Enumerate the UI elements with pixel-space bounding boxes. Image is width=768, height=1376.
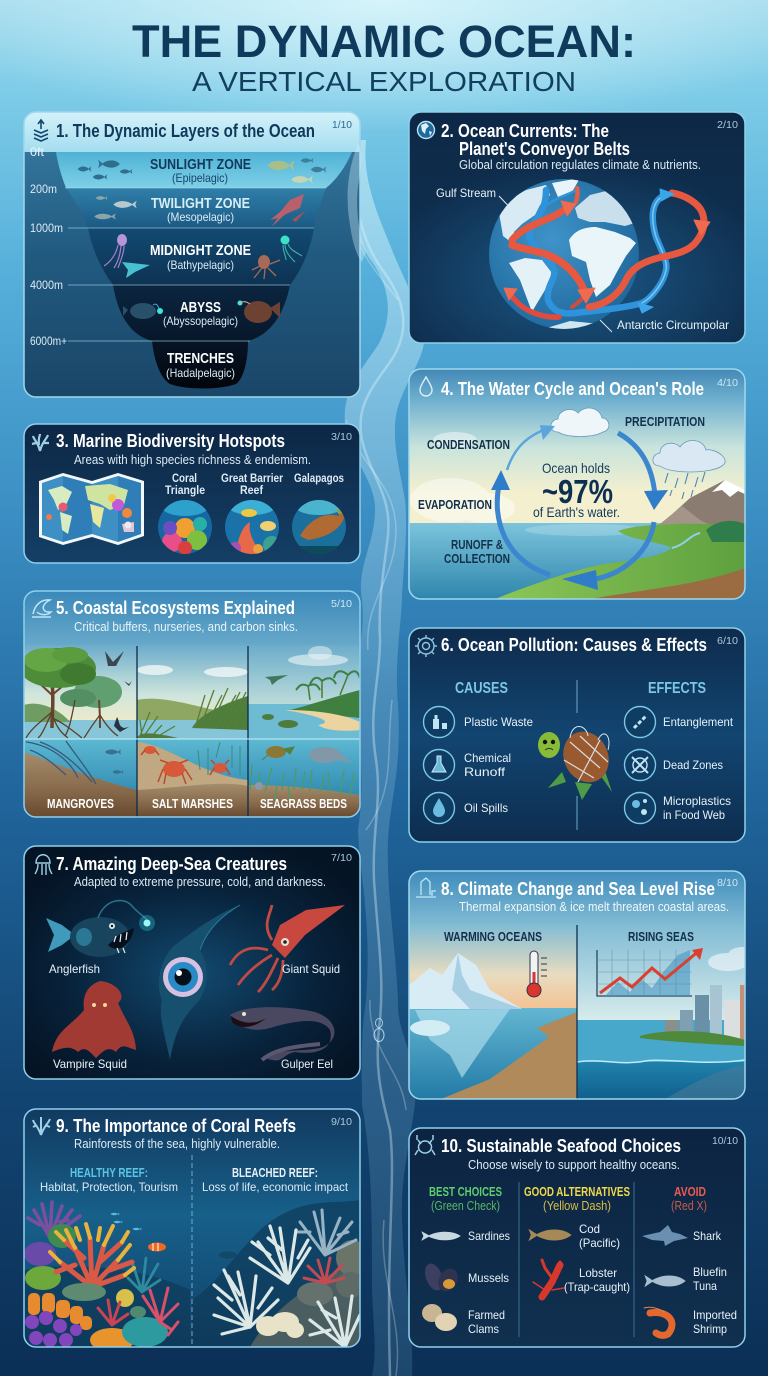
effect labels: Microplastics: [663, 794, 731, 808]
sardine: [421, 1231, 461, 1241]
hotspot labels: Triangle: [165, 483, 205, 497]
heading 2: 2. Ocean Currents: The: [441, 121, 609, 141]
column: good alternatives: (Pacific): [579, 1236, 620, 1250]
hotspot image: galapagos: [292, 497, 346, 554]
column: avoid: Imported: [693, 1308, 737, 1322]
column: good alternatives: (Trap-caught): [564, 1280, 630, 1294]
lobster: [533, 1260, 564, 1297]
heading 6: 6. Ocean Pollution: Causes & Effects: [441, 635, 707, 655]
label: Anglerfish: Anglerfish: [49, 962, 100, 976]
sunlight zone: [56, 152, 352, 188]
panel 1: ocean layers: [24, 112, 360, 397]
zone labels: TWILIGHT ZONE: [151, 196, 250, 212]
effect labels: in Food Web: [663, 808, 725, 822]
column titles: CAUSES: [455, 680, 508, 697]
page count 2: 2/10: [717, 119, 738, 131]
depth labels: 1000m: [30, 221, 63, 235]
trenches: [152, 341, 248, 388]
hotspot labels: Great Barrier: [221, 471, 283, 485]
zone labels: MIDNIGHT ZONE: [150, 243, 251, 259]
cycle labels: [418, 415, 705, 566]
ecosystem labels: SALT MARSHES: [152, 796, 233, 811]
label: Gulf Stream: [436, 188, 508, 206]
panel 10 frame: [409, 1128, 745, 1347]
page count 3: 3/10: [331, 431, 352, 443]
column: best choices: Clams: [468, 1322, 499, 1336]
effect labels: Entanglement: [663, 715, 734, 729]
cause labels: Runoff: [464, 765, 506, 779]
header band: [24, 112, 360, 152]
label: Gulf Stream: Gulf Stream: [436, 186, 496, 200]
effect labels: Dead Zones: [663, 758, 723, 772]
page count 8: 8/10: [717, 877, 738, 889]
column: avoid: Bluefin: [693, 1265, 727, 1279]
depth labels: 200m: [30, 182, 57, 196]
subtitle 3: Areas with high species richness & endemism.: [74, 453, 311, 467]
page count 6: 6/10: [717, 635, 738, 647]
depth labels: 6000m+: [30, 334, 67, 348]
reef captions: [40, 1166, 349, 1194]
heading 9: 9. The Importance of Coral Reefs: [56, 1116, 296, 1136]
tuna: [644, 1275, 686, 1287]
land: [495, 521, 745, 599]
icon: jellyfish: [35, 855, 52, 875]
label: Gulper Eel: Gulper Eel: [281, 1057, 333, 1071]
heading 2: Planet's Conveyor Belts: [459, 139, 630, 159]
panel 2: ocean currents: [409, 112, 745, 343]
heading 4: 4. The Water Cycle and Ocean's Role: [441, 379, 704, 399]
callout: 97 percent: of Earth's water.: [533, 504, 620, 520]
panel 7: deep sea creatures: [24, 846, 360, 1079]
column titles: [455, 680, 706, 697]
cause labels: Plastic Waste: [464, 715, 533, 729]
zone labels: (Hadalpelagic): [166, 366, 235, 380]
shark: [642, 1225, 688, 1246]
column: best choices: Sardines: [468, 1229, 510, 1243]
title: A VERTICAL EXPLORATION: [192, 66, 576, 97]
column dividers: [137, 646, 248, 817]
hotspot labels: Reef: [240, 483, 264, 497]
icon: coral: [33, 1117, 50, 1135]
subtitle 5: Critical buffers, nurseries, and carbon sinks.: [74, 620, 298, 634]
icon: layers: [34, 120, 48, 141]
cycle labels: CONDENSATION: [427, 438, 510, 452]
heading 5: 5. Coastal Ecosystems Explained: [56, 598, 295, 618]
hotspot labels: Coral: [172, 471, 197, 485]
column: avoid: Shrimp: [693, 1322, 727, 1336]
city skyline: [640, 985, 746, 1046]
warming scene: [409, 925, 577, 1099]
column: good alternatives: Cod: [579, 1222, 600, 1236]
zone labels: (Epipelagic): [172, 171, 228, 185]
heading 3: 3. Marine Biodiversity Hotspots: [56, 431, 285, 451]
current arrows: [504, 188, 710, 317]
column: mangroves: [20, 645, 137, 817]
cycle labels: COLLECTION: [444, 552, 510, 566]
rising seas scene: [577, 925, 756, 1099]
ecosystem labels: MANGROVES: [47, 796, 114, 811]
thermometer: [527, 951, 547, 997]
panel 4 frame: [409, 369, 745, 599]
callout: 97 percent: Ocean holds: [542, 460, 610, 476]
icon: crab: [415, 1135, 435, 1155]
cause labels: Oil Spills: [464, 801, 508, 815]
folded world map: [39, 473, 144, 545]
vampire squid: [52, 981, 136, 1058]
label: rising seas: RISING SEAS: [628, 930, 694, 944]
column: seagrass beds: [248, 645, 360, 817]
cause labels: Chemical: [464, 751, 511, 765]
panel 3: biodiversity hotspots: [24, 424, 360, 563]
panel 7 frame: [24, 846, 360, 1079]
column: avoid: AVOID: [674, 1184, 706, 1199]
reef captions: BLEACHED REEF:: [232, 1166, 318, 1180]
label: Vampire Squid: Vampire Squid: [53, 1057, 127, 1071]
hotspot image: coral triangle: [158, 496, 212, 555]
column: best choices: BEST CHOICES: [429, 1184, 502, 1199]
cycle labels: RUNOFF &: [451, 538, 503, 552]
icon: gear: [415, 635, 437, 657]
hotspot labels: Galapagos: [294, 471, 344, 485]
panel 5: coastal ecosystems: [20, 591, 360, 817]
gulper eel: [230, 1007, 334, 1060]
depth labels: 0ft: [30, 145, 45, 159]
mussels: [422, 1261, 462, 1295]
effect icons: [624, 706, 656, 824]
column: avoid: (Red X): [671, 1198, 707, 1213]
title: THE DYNAMIC OCEAN:: [132, 16, 636, 67]
page count 1: 1/10: [332, 119, 352, 131]
cause labels: [464, 715, 533, 815]
effect labels: [663, 715, 734, 822]
heading 10: 10. Sustainable Seafood Choices: [441, 1136, 681, 1156]
iceberg: [409, 953, 522, 1078]
reef captions: Loss of life, economic impact: [202, 1180, 349, 1194]
icon: droplet: [420, 377, 432, 396]
midnight zone: [88, 228, 314, 285]
reef captions: HEALTHY REEF:: [70, 1166, 148, 1180]
column: best choices: Mussels: [468, 1271, 509, 1285]
heading 2: [441, 121, 630, 159]
panel 9 frame: [24, 1109, 360, 1347]
heading 1: 1. The Dynamic Layers of the Ocean: [56, 121, 315, 141]
subtitle 8: Thermal expansion & ice melt threaten coastal areas.: [459, 900, 729, 914]
abyss: [113, 285, 290, 341]
shrimp: [644, 1307, 672, 1335]
clouds: [551, 408, 725, 472]
heading 7: 7. Amazing Deep-Sea Creatures: [56, 854, 287, 874]
column: best choices: [421, 1184, 510, 1336]
zone labels: (Bathypelagic): [167, 258, 234, 272]
column: avoid: Shark: [693, 1229, 722, 1243]
giant squid: [230, 905, 345, 992]
water ribbon: [345, 140, 424, 1376]
coast: [441, 1012, 577, 1099]
column: good alternatives: (Yellow Dash): [543, 1198, 611, 1213]
callout: 97 percent: [533, 460, 620, 520]
label: Giant Squid: Giant Squid: [282, 962, 340, 976]
subtitle 10: Choose wisely to support healthy oceans.: [468, 1158, 680, 1172]
subtitle 2: Global circulation regulates climate & nutrients.: [459, 158, 701, 172]
healthy reef: [24, 1202, 178, 1352]
zone labels: TRENCHES: [167, 351, 234, 367]
icon: buildings: [416, 878, 436, 897]
ecosystem labels: [47, 796, 347, 811]
cycle arrows: [491, 425, 668, 590]
column: good alternatives: GOOD ALTERNATIVES: [524, 1184, 630, 1199]
page count 10: 10/10: [712, 1135, 738, 1147]
zone labels: SUNLIGHT ZONE: [150, 157, 251, 173]
column: salt marshes: [137, 645, 248, 817]
hotspot image: great barrier reef: [225, 497, 281, 554]
icon: wave: [32, 600, 51, 617]
mountains: [660, 480, 744, 524]
water falling over panel edge: [348, 143, 366, 262]
column: best choices: Farmed: [468, 1308, 505, 1322]
cod: [528, 1229, 572, 1241]
hotspot labels: [165, 471, 344, 497]
label: Antarctic Circumpolar: Antarctic Circumpolar: [617, 318, 729, 332]
icon: entangled turtle: [538, 724, 617, 800]
icon: globe: [418, 122, 434, 138]
panel 2 frame: [409, 112, 745, 343]
title: [132, 16, 636, 97]
panel 6: ocean pollution: [409, 628, 745, 842]
sea creatures: [78, 158, 326, 323]
panel 10: sustainable seafood: [409, 1128, 745, 1347]
panel 3 frame: [24, 424, 360, 563]
panel 9: coral reefs: [24, 1109, 368, 1352]
heading 8: 8. Climate Change and Sea Level Rise: [441, 879, 715, 899]
ecosystem labels: SEAGRASS BEDS: [260, 796, 347, 811]
zone labels: ABYSS: [180, 300, 221, 316]
panel 4: water cycle: [409, 369, 745, 599]
subtitle 7: Adapted to extreme pressure, cold, and darkness.: [74, 875, 326, 889]
icon: rain: [665, 472, 705, 499]
page count 5: 5/10: [331, 598, 352, 610]
column: best choices: (Green Check): [431, 1198, 500, 1213]
page count 4: 4/10: [717, 377, 738, 389]
globe: [489, 178, 639, 334]
column: good alternatives: [524, 1184, 630, 1297]
subtitle 9: Rainforests of the sea, highly vulnerable.: [74, 1137, 280, 1151]
zone labels: (Abyssopelagic): [163, 314, 238, 328]
clams: [422, 1304, 457, 1331]
reef backdrop: [24, 1200, 360, 1347]
chart: [597, 948, 703, 996]
page count 9: 9/10: [331, 1116, 352, 1128]
zone labels: (Mesopelagic): [167, 210, 234, 224]
cycle labels: EVAPORATION: [418, 498, 492, 512]
center creature with big eye: [159, 905, 240, 1060]
anglerfish: [46, 901, 155, 957]
twilight zone: [66, 188, 326, 228]
column: good alternatives: Lobster: [579, 1266, 617, 1280]
cycle labels: PRECIPITATION: [625, 415, 705, 429]
panel 6 frame: [409, 628, 745, 842]
icon: coral: [32, 434, 49, 451]
panel 8: climate change: [409, 871, 756, 1099]
bleached reef: [214, 1210, 368, 1347]
column: avoid: [642, 1184, 737, 1336]
cause icons: [424, 706, 454, 824]
callout: 97 percent: ~97%: [542, 473, 613, 510]
column titles: EFFECTS: [648, 680, 706, 697]
depth labels: [30, 145, 67, 348]
zone labels: [150, 157, 251, 380]
reef captions: Habitat, Protection, Tourism: [40, 1180, 178, 1194]
column: avoid: Tuna: [693, 1279, 717, 1293]
panel 1 frame: [24, 112, 360, 397]
panel 5 frame: [24, 591, 360, 817]
panel 8 frame: [409, 871, 745, 1099]
label: warming oceans: WARMING OCEANS: [444, 930, 542, 944]
page count 7: 7/10: [331, 852, 352, 864]
depth labels: 4000m: [30, 278, 63, 292]
